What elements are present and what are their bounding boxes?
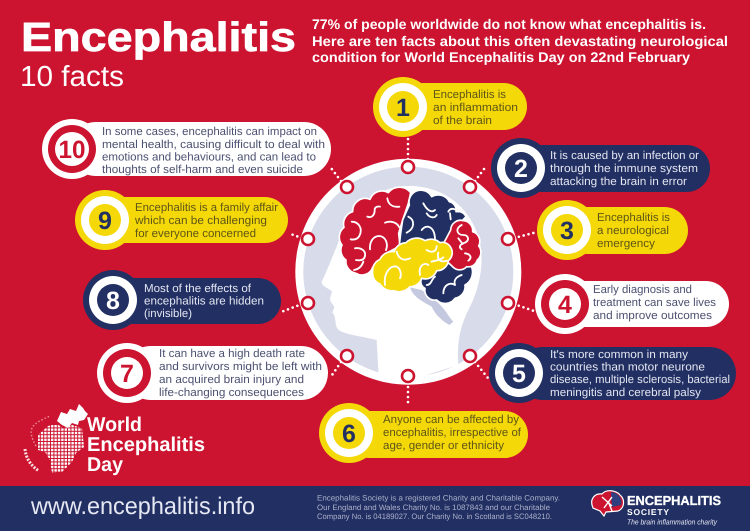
fact 4: treatment can save lives xyxy=(593,297,716,309)
fact 2 xyxy=(491,138,710,198)
fact 3: a neurological xyxy=(597,225,669,237)
fact 9: 9 xyxy=(98,207,112,235)
yellow temporal lobe xyxy=(373,238,452,292)
fact 3 xyxy=(537,200,688,260)
fact 7: It can have a high death rate xyxy=(159,348,305,360)
outer disc xyxy=(295,159,521,385)
puzzle pieces xyxy=(57,404,88,428)
fact 3: Encephalitis is xyxy=(597,212,670,224)
head and brain xyxy=(322,186,482,381)
intro text: condition for World Encephalitis Day on 22nd February xyxy=(312,49,690,65)
dotted connectors xyxy=(281,134,537,406)
logo wording: Encephalitis xyxy=(87,434,205,456)
fact 8: Most of the effects of xyxy=(144,283,252,295)
dotted globe xyxy=(25,416,84,473)
charity statement: Our England and Wales Charity No. is 1087843 and our Charitable xyxy=(317,503,550,512)
fact 7: an acquired brain injury and xyxy=(159,374,304,386)
navy lower lobe xyxy=(421,263,473,303)
website: www.encephalitis.info xyxy=(30,493,255,520)
fact 2: attacking the brain in error xyxy=(550,176,687,188)
fact 5 xyxy=(489,343,736,403)
fact 10: thoughts of self-harm and even suicide xyxy=(102,164,303,176)
fact 5: meningitis and cerebral palsy xyxy=(550,387,701,399)
title: 10 facts xyxy=(20,61,124,93)
title xyxy=(20,14,296,93)
fact 9: which can be challenging xyxy=(134,215,267,227)
charity statement xyxy=(317,494,560,521)
fact 3: emergency xyxy=(597,238,655,250)
fact 2: through the immune system xyxy=(550,163,698,175)
fact 5: disease, multiple sclerosis, bacterial xyxy=(550,374,730,386)
fact 1: of the brain xyxy=(433,115,492,127)
World Encephalitis Day logo xyxy=(25,404,205,476)
brain folds xyxy=(351,198,471,293)
fact 2: It is caused by an infection or xyxy=(550,150,699,162)
intro text xyxy=(312,16,728,65)
fact 1 xyxy=(373,77,527,137)
fact 6: age, gender or ethnicity xyxy=(383,440,504,452)
red frontal lobe xyxy=(339,187,411,275)
Encephalitis Society logo xyxy=(592,491,721,526)
brain stem xyxy=(410,287,453,325)
logo brain xyxy=(592,491,624,516)
charity statement: Encephalitis Society is a registered Charity and Charitable Company. xyxy=(317,494,560,502)
fact 1: Encephalitis is xyxy=(433,89,506,101)
fact 7: and survivors might be left with xyxy=(159,361,322,373)
fact 6 xyxy=(319,403,528,463)
logo tagline: The brain inflammation charity xyxy=(627,518,718,526)
fact 8: 8 xyxy=(106,287,120,315)
fact 9: for everyone concerned xyxy=(135,228,256,240)
fact 1: an inflammation xyxy=(433,102,518,114)
logo wording: Day xyxy=(87,454,124,476)
fact 6: 6 xyxy=(342,420,356,448)
logo wording: World xyxy=(87,414,142,436)
fact 4 xyxy=(535,274,729,334)
title: Encephalitis xyxy=(21,14,296,60)
fact 6: encephalitis, irrespective of xyxy=(383,427,522,439)
fact 10: 10 xyxy=(58,136,86,164)
Encephalitis Society logo: SOCIETY xyxy=(627,507,669,517)
fact 7 xyxy=(97,343,328,403)
intro text: Here are ten facts about this often devastating neurological xyxy=(312,33,728,49)
connector rings xyxy=(302,161,514,382)
fact 5: countries than motor neurone xyxy=(550,362,705,374)
fact 9 xyxy=(75,190,288,250)
fact 8: encephalitis are hidden xyxy=(144,296,264,308)
fact 7: life-changing consequences xyxy=(159,387,304,399)
fact 3: 3 xyxy=(560,217,574,245)
head silhouette xyxy=(322,186,482,381)
fact 9: Encephalitis is a family affair xyxy=(135,202,278,214)
fact 5: 5 xyxy=(512,360,526,388)
logo name: ENCEPHALITIS xyxy=(627,493,721,508)
red back lobe xyxy=(444,220,481,270)
logo wording xyxy=(87,414,205,476)
fact 10: emotions and behaviours, and can lead to xyxy=(102,152,316,164)
fact 10 xyxy=(42,119,331,179)
fact 10: In some cases, encephalitis can impact on xyxy=(102,126,317,138)
inner disc xyxy=(303,167,513,377)
fact 5: It's more common in many xyxy=(550,349,688,361)
fact 7: 7 xyxy=(120,360,134,388)
fact 4: Early diagnosis and xyxy=(593,284,692,296)
charity statement: Company No. is 04189027. Our Charity No. in Scotland is SC048210. xyxy=(317,512,552,521)
fact 8 xyxy=(83,270,281,330)
fact 1: 1 xyxy=(396,94,410,122)
fact 2: 2 xyxy=(514,155,528,183)
fact 4: 4 xyxy=(558,291,572,319)
fact 6: Anyone can be affected by xyxy=(383,414,519,426)
fact 4: and improve outcomes xyxy=(593,310,712,322)
central brain illustration xyxy=(295,159,521,385)
fact 10: mental health, causing difficult to deal with xyxy=(102,139,325,151)
footer band xyxy=(0,486,750,531)
intro text: 77% of people worldwide do not know what encephalitis is. xyxy=(312,16,706,32)
fact 8: (invisible) xyxy=(144,308,192,320)
navy parietal lobe xyxy=(399,190,466,245)
